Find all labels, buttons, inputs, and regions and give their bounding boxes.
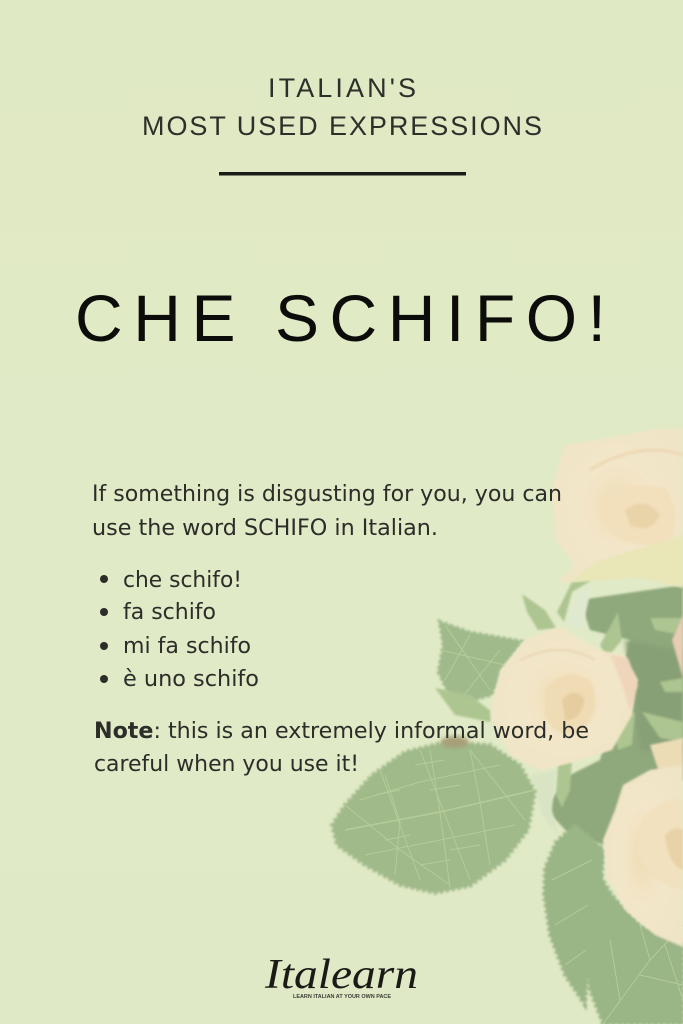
pale stem lower <box>532 770 558 835</box>
note text <box>94 718 589 777</box>
pink bud at right edge <box>672 615 683 678</box>
rose: bottom right <box>603 738 683 947</box>
illustration: roses and leaves <box>332 428 683 1024</box>
intro text: If something is disgusting for you, you can <box>92 481 562 507</box>
rose: centre <box>490 627 638 770</box>
bullet list: fa schifo <box>123 599 216 625</box>
bullet list: è uno schifo <box>123 666 259 692</box>
leaf veins <box>345 625 683 1024</box>
intro text: use the word SCHIFO in Italian. <box>92 515 438 541</box>
leaf: large centre <box>332 742 535 893</box>
title underline <box>219 172 466 176</box>
heading: Italian's most used expressions: MOST USED EXPRESSIONS <box>142 111 542 141</box>
bullet list: che schifo! <box>123 567 242 593</box>
bullet list <box>100 567 259 692</box>
leaf brown spot <box>441 736 469 748</box>
small green sepals <box>435 580 683 808</box>
main title: CHE SCHIFO! <box>75 281 606 355</box>
logo: Italearn: Italearn <box>264 952 418 998</box>
rose: top right <box>552 428 683 588</box>
leaf: bottom right front <box>580 872 683 1024</box>
note text: careful when you use it! <box>94 751 359 777</box>
heading: Italian's most used expressions: ITALIAN'S <box>268 73 416 103</box>
dark foliage behind roses <box>545 585 683 845</box>
note text: Note: this is an extremely informal word, be <box>94 718 589 744</box>
shadow patches in foliage <box>625 640 683 760</box>
heading: Italian's most used expressions <box>142 73 542 141</box>
bullet list: mi fa schifo <box>123 633 251 659</box>
leaf: bottom right back <box>544 825 605 1005</box>
intro text <box>92 481 562 541</box>
leaf: upper left <box>438 621 522 703</box>
logo: Italearn: LEARN ITALIAN AT YOUR OWN PACE <box>293 994 391 1000</box>
pale stem <box>566 585 592 630</box>
